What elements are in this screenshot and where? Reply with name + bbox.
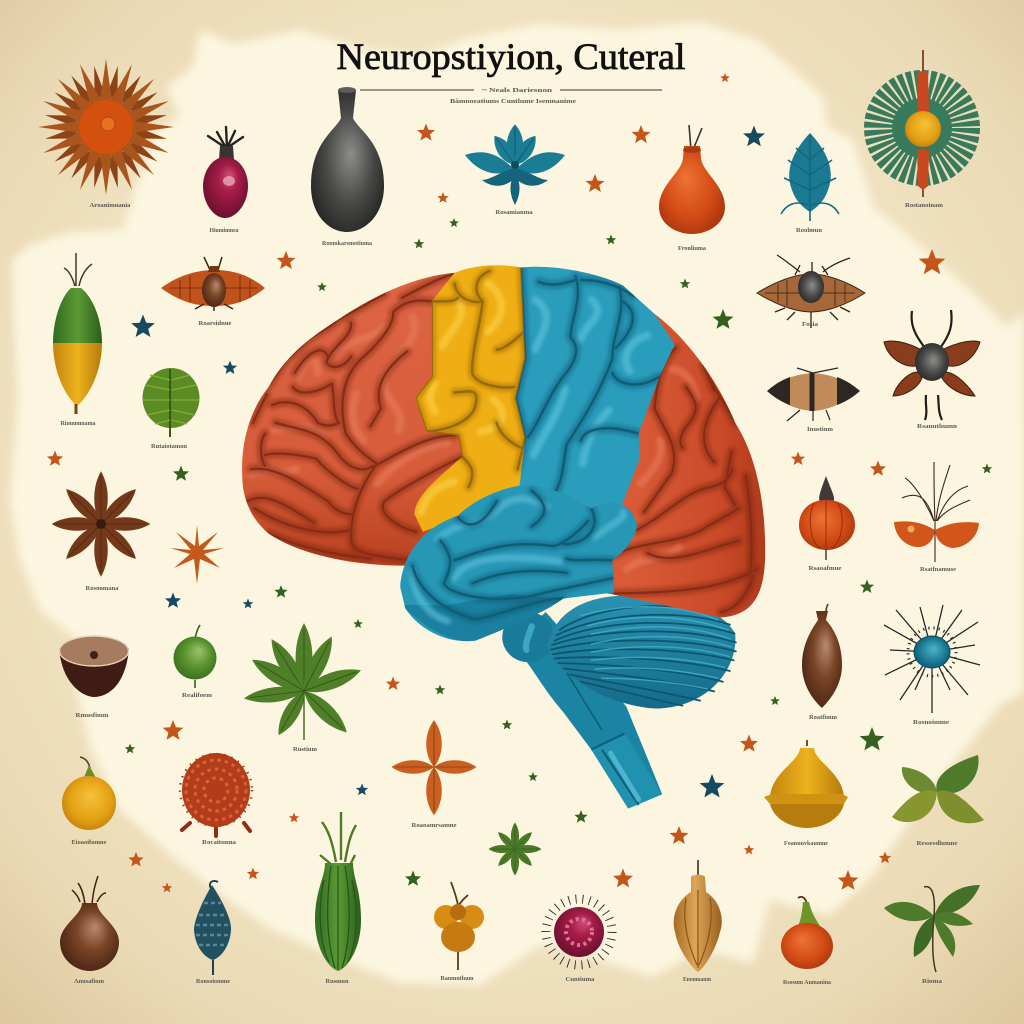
icon: teal flower — [465, 124, 565, 216]
icon: teal feather leaf — [781, 133, 839, 234]
subtitle block: Bâmnoeatiums Cuntlume Isemnanime — [450, 98, 576, 105]
subtitle block: ~ Neals Dariesnon — [482, 87, 553, 94]
icon: brown halved nut bowl — [59, 636, 129, 719]
icon: dark winged beetle: Rsanuthumn — [917, 423, 957, 430]
icon: orange four-petal flower: Roaoamrsamne — [412, 822, 457, 829]
icon: red spiky fruit: Rocaitunna — [202, 839, 237, 846]
icon: banded tan lens bug: Inustinm — [807, 426, 834, 433]
icon: yellow orange fruit: Eioaoifumne — [72, 839, 107, 846]
icon: maroon radiating seed: Cuntiuma — [566, 976, 595, 983]
icon: banded tan lens bug — [767, 368, 860, 433]
icon: red spiky fruit — [180, 753, 252, 846]
icon: seven-leaf green plant: Rustium — [293, 746, 318, 753]
icon: teal feather leaf: Roolmun — [796, 227, 822, 234]
icon: orange wings plant — [894, 462, 979, 573]
icon: black vase: Ruomkarsmotiuma — [322, 240, 373, 247]
icon: orange tomato gourd: Rsosum Aumanina — [783, 979, 832, 986]
icon: green fan with spindle: Rostanoinam — [905, 202, 944, 209]
icon: orange winged insect: Roarsidnue — [198, 320, 232, 327]
icon: brown halved nut bowl: Rmusfimm — [76, 712, 109, 719]
icon: brown acorn flask — [802, 604, 842, 721]
icon: tan onion bulb: Enomnanm — [683, 976, 711, 983]
icon: black vase — [311, 87, 384, 247]
icon: star anise seed flower — [52, 471, 150, 592]
icon: small orange star flower — [170, 525, 224, 584]
icon: maroon beet — [203, 127, 248, 234]
icon: green leaf sprig — [884, 885, 980, 985]
icon: yellow orange fruit — [62, 757, 116, 846]
icon: golden bowl — [764, 740, 848, 847]
title: Neuropstiyion, Cuteral — [336, 37, 686, 78]
icon: dark-eyed spiny lens insect — [757, 255, 865, 328]
icon: green lime — [174, 625, 216, 699]
icon: green and yellow pod: Rinuumnama — [60, 420, 96, 427]
icon: green and yellow pod — [53, 253, 102, 427]
icon: brown round pot: Anusafinm — [74, 978, 105, 985]
icon: teal eye with radiating filaments — [884, 605, 980, 726]
icon: dark-eyed spiny lens insect: Fosia — [802, 321, 819, 328]
icon: red gourd — [659, 125, 725, 252]
icon: dark teal pinecone: Ronsoiomme — [196, 978, 230, 985]
icon: orange winged insect — [161, 257, 265, 327]
icon: yellow clustered plant — [434, 882, 484, 982]
icon: maroon radiating seed — [546, 899, 612, 983]
icon: brown sun flower — [38, 59, 174, 209]
icon: yellow clustered plant: Ranmnthum — [440, 975, 474, 982]
icon: tan onion bulb — [674, 860, 722, 983]
icon: teal eye with radiating filaments: Rosnoimme — [913, 719, 949, 726]
brain illustration — [230, 255, 784, 809]
icon: brown round pot — [60, 876, 119, 985]
icon: brown acorn flask: Roatfimm — [809, 714, 838, 721]
cerebellum — [547, 595, 736, 709]
lobe: outer red cortex — [242, 272, 766, 618]
brainstem — [502, 612, 662, 809]
icon: red gourd: Fronliuma — [678, 245, 707, 252]
icon: olive green four leaves — [892, 755, 984, 847]
icon: golden bowl: Foanunvkaumne — [784, 840, 828, 847]
icon: seven-leaf green plant — [243, 623, 364, 753]
lobe: blue upper cortex — [516, 266, 675, 508]
icon: green lime: Realifoem — [182, 692, 213, 699]
icon: orange tomato gourd — [781, 897, 833, 986]
icon: orange wings plant: Rsatfnamuse — [920, 566, 956, 573]
icon: orange four-petal flower — [392, 720, 476, 829]
icon: green ribbed melon: Rutaiotamon — [151, 443, 187, 450]
icon: six-leaf green sprig — [488, 822, 542, 876]
scattered star accents — [47, 73, 992, 892]
icon: maroon beet: Hiumimnea — [210, 227, 239, 234]
icon: teal flower: Rosamianma — [496, 209, 533, 216]
icon: dark winged beetle — [884, 310, 980, 430]
icon: orange pumpkin with dark cap: Rsaoafmue — [808, 565, 842, 572]
subtitle block — [360, 87, 662, 105]
icon: green ribbed melon — [142, 368, 200, 450]
lobe: yellow parietal — [414, 265, 526, 532]
icon: orange pumpkin with dark cap — [799, 476, 855, 572]
icon: green ribbed pod: Rusmun — [326, 978, 349, 985]
icon: star anise seed flower: Rosonmana — [86, 585, 119, 592]
icon: brown sun flower: Aroanimnania — [90, 202, 131, 209]
icon: dark teal pinecone — [194, 881, 231, 985]
icon: green fan with spindle — [880, 50, 964, 209]
icon: green leaf sprig: Rioma — [922, 978, 943, 985]
icon: olive green four leaves: Ressesdlumne — [916, 840, 958, 847]
icon: green ribbed pod — [315, 812, 361, 985]
lobe: blue temporal — [400, 485, 637, 642]
